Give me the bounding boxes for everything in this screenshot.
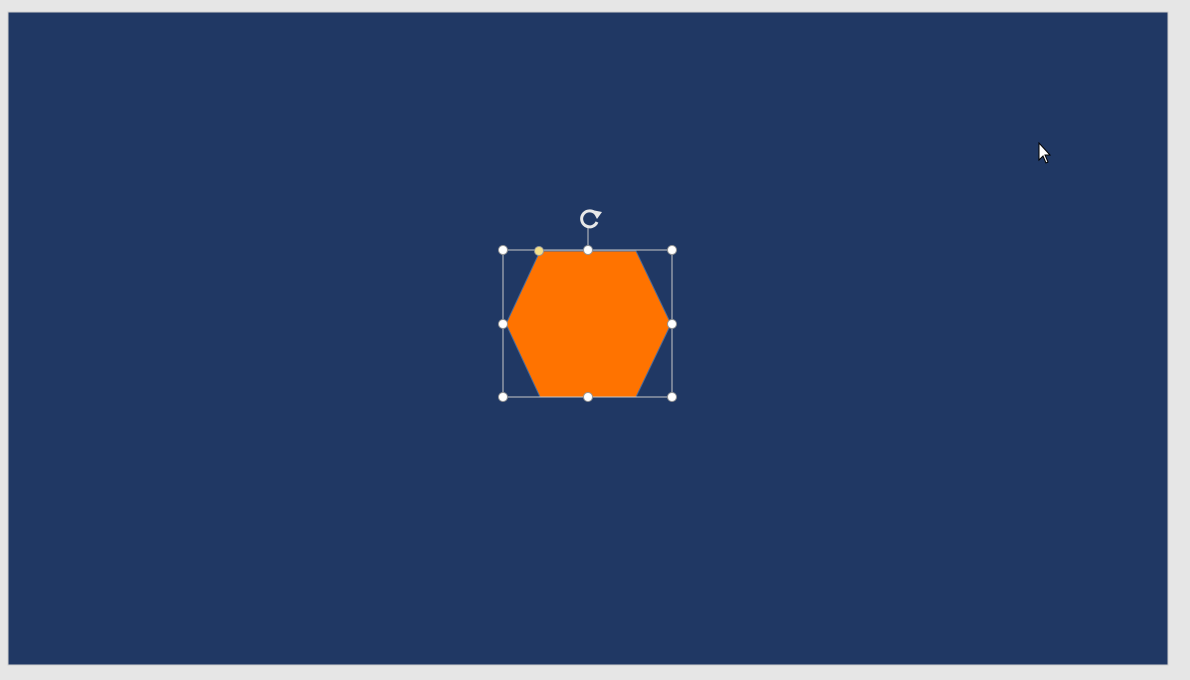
hexagon shape <box>506 251 671 397</box>
icon: rotate handle <box>582 210 602 227</box>
icon: mouse cursor <box>1039 143 1050 163</box>
selection box with handles <box>498 228 676 402</box>
